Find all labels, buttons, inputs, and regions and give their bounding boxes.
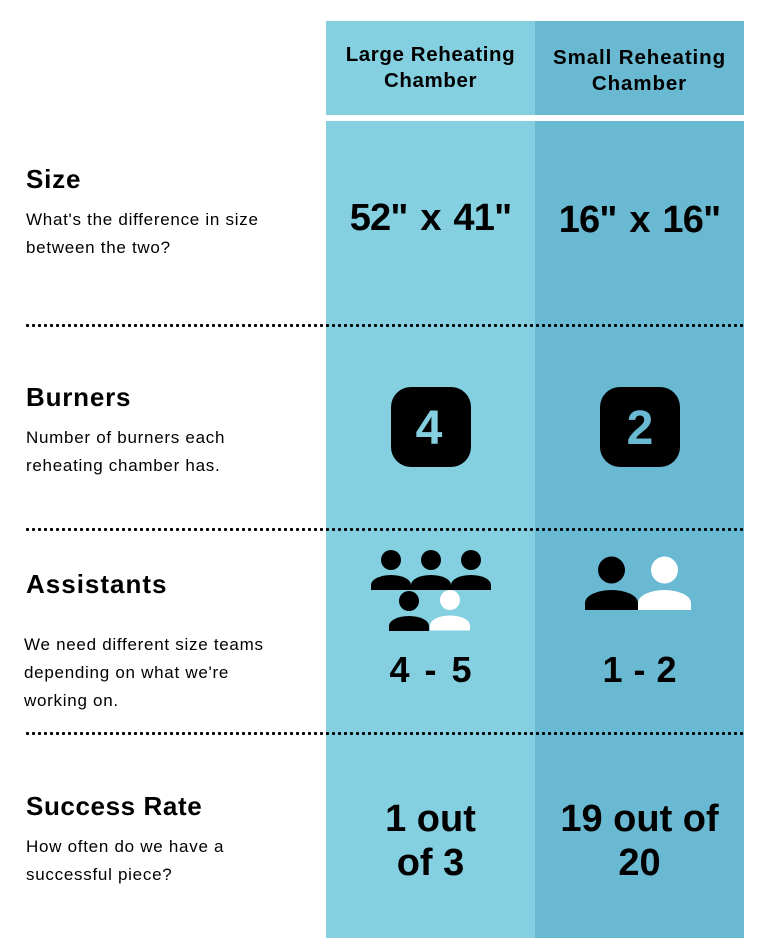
- header label: small: Chamber: [592, 72, 687, 95]
- text: size description: What's the difference in size: [26, 210, 259, 229]
- heading: assistants: Assistants: [26, 569, 168, 599]
- value: large success rate: of 3: [397, 842, 464, 884]
- text: burners description: [26, 428, 225, 475]
- column body: large reheating chamber: [326, 121, 535, 938]
- heading: burners: Burners: [26, 382, 131, 412]
- text: burners description: Number of burners each: [26, 428, 225, 447]
- column header: large reheating chamber: [326, 21, 535, 115]
- text: success rate description: How often do we have a: [26, 837, 224, 856]
- text: assistants description: We need different size teams: [24, 635, 264, 654]
- icon: 4 burners badge: [391, 387, 471, 467]
- text: success rate description: [26, 837, 224, 884]
- text: assistants description: working on.: [24, 691, 119, 710]
- text: size description: [26, 210, 259, 257]
- icon: 2 burners badge: [600, 387, 680, 467]
- value: large size: 52" x 41": [350, 197, 511, 239]
- value: small success rate: 20: [618, 842, 661, 884]
- header label: large: Chamber: [384, 69, 477, 92]
- header label: large: [346, 43, 515, 92]
- value: small success rate: 19 out of: [560, 798, 719, 840]
- text: assistants description: depending on what we're: [24, 663, 229, 682]
- header label: small: [553, 46, 726, 95]
- header label: small: Small Reheating: [553, 46, 726, 69]
- icon: 2 burners badge: 2: [627, 402, 653, 455]
- text: burners description: reheating chamber has.: [26, 456, 220, 475]
- header label: large: Large Reheating: [346, 43, 515, 66]
- value: small assistants: 1 - 2: [602, 649, 677, 690]
- value: large success rate: 1 out: [385, 798, 476, 840]
- value: small size: 16" x 16": [559, 199, 720, 241]
- column header: small reheating chamber: [535, 21, 744, 115]
- value: small success rate: [560, 798, 719, 884]
- heading: success rate: Success Rate: [26, 791, 202, 821]
- value: large assistants: 4 - 5: [389, 649, 472, 690]
- text: success rate description: successful piece?: [26, 865, 172, 884]
- column body: small reheating chamber: [535, 121, 744, 938]
- text: assistants description: [24, 635, 264, 710]
- text: size description: between the two?: [26, 238, 171, 257]
- value: large success rate: [385, 798, 476, 884]
- heading: size: Size: [26, 164, 81, 194]
- icon: 4 burners badge: 4: [416, 402, 442, 455]
